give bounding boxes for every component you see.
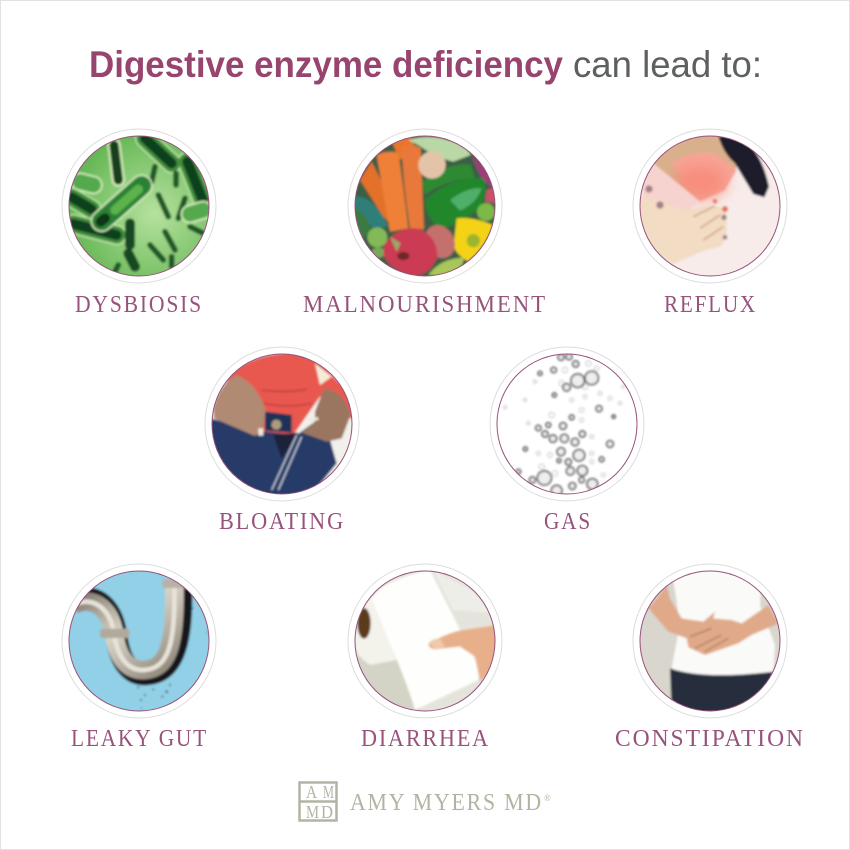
icon: leaking pipe <box>62 564 216 718</box>
label: diarrhea: DIARRHEA <box>361 726 490 752</box>
panel: diarrhea <box>348 564 502 752</box>
logo mark: M <box>306 802 319 822</box>
panel: malnourishment <box>303 129 547 318</box>
panel: bloating <box>205 347 359 535</box>
label: bloating: BLOATING <box>219 509 345 535</box>
title: Digestive enzyme deficiency <box>89 44 563 85</box>
label: dysbiosis: DYSBIOSIS <box>75 292 203 318</box>
icon: tight jeans <box>205 347 359 501</box>
logo wordmark: AMY MYERS MD <box>350 790 543 816</box>
logo mark: M <box>323 782 334 802</box>
panel: gas <box>490 347 644 535</box>
label: reflux: REFLUX <box>664 292 757 318</box>
label: gas: GAS <box>544 509 592 535</box>
icon: woman holding stomach <box>633 564 787 718</box>
icon: toilet paper <box>348 564 502 718</box>
icon: woman with chest burn <box>633 129 787 283</box>
icon: bubbles <box>490 347 644 501</box>
logo wordmark: ® <box>544 793 551 803</box>
logo mark: A <box>306 782 317 802</box>
label: malnourishment: MALNOURISHMENT <box>303 292 547 318</box>
panel: constipation <box>615 564 805 752</box>
label: constipation: CONSTIPATION <box>615 726 805 752</box>
logo: Amy Myers MD <box>299 782 551 822</box>
label: leaky gut: LEAKY GUT <box>71 726 208 752</box>
title: can lead to: <box>573 44 762 85</box>
icon: vegetables <box>348 129 502 283</box>
panel: leaky gut <box>62 564 216 752</box>
panel: dysbiosis <box>62 129 216 318</box>
icon: green bacteria <box>62 129 216 283</box>
logo mark: D <box>321 802 333 822</box>
logo mark <box>299 782 337 822</box>
panel: reflux <box>633 129 787 318</box>
